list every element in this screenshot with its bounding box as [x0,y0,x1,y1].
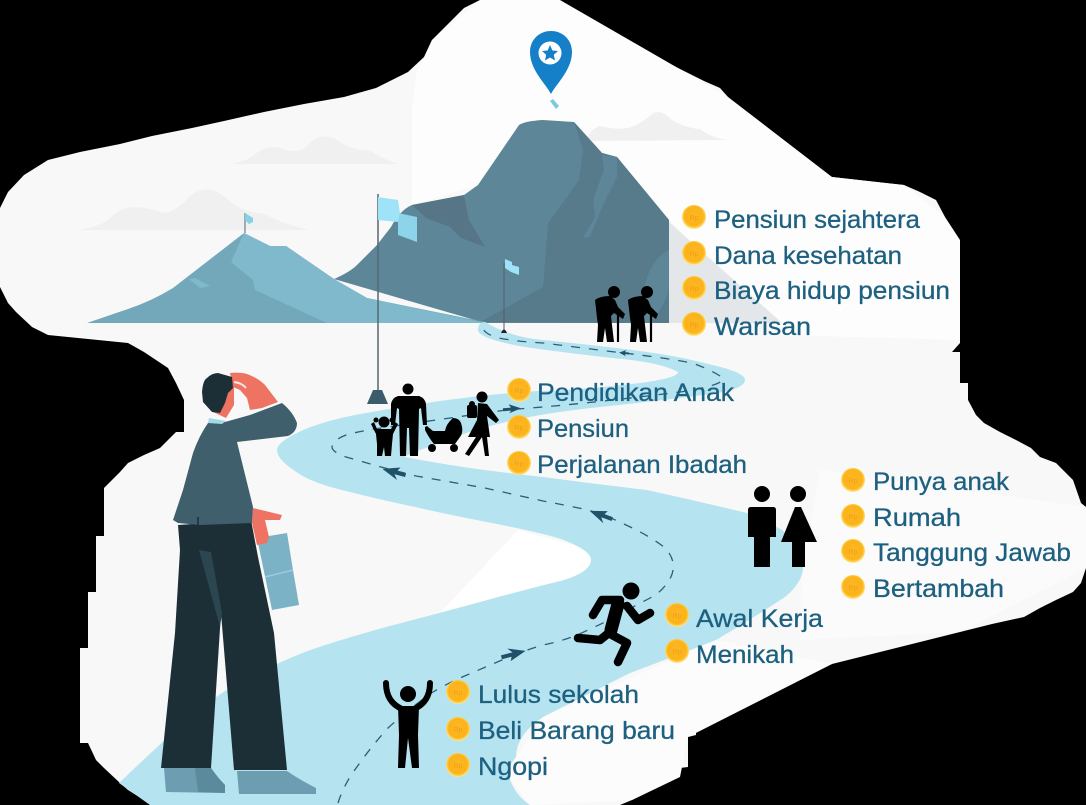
label: Perjalanan Ibadah [537,451,747,479]
coin: Rp [454,690,463,697]
cloud left [80,189,310,230]
coin [841,468,865,492]
coin: Rp [515,425,524,432]
label: Bertambah [873,575,1004,603]
list: Punya anak group [841,468,1071,603]
silhouette: elderly couple [595,286,658,342]
list: Lulus sekolah group [446,680,675,781]
arrow: road middle [587,505,614,526]
coin [665,603,689,627]
label: Warisan [714,313,811,341]
silhouette: runner [578,582,650,662]
list: Pendidikan Anak group [507,378,747,479]
dashed route line [332,328,723,803]
coin [841,575,865,599]
raised forearm hand [230,373,278,410]
small mountain [87,233,485,323]
silhouette: family with stroller [371,384,499,456]
mountain shadow [669,222,782,323]
label: Dana kesehatan [714,242,902,270]
coin [682,205,706,229]
coin: Rp [690,215,699,222]
coin: Rp [454,763,463,770]
coin: Rp [690,286,699,293]
coin [682,312,706,336]
location pin [530,31,572,109]
coin [507,415,531,439]
coin: Rp [673,649,682,656]
coin: Rp [673,613,682,620]
label: Beli Barang baru [478,717,675,745]
shoes [164,768,316,794]
jacket [173,403,297,525]
label: Biaya hidup pensiun [714,277,950,305]
label: Menikah [696,641,794,669]
finger highlight [234,382,246,388]
arrow: road start [500,644,527,663]
coin [665,639,689,663]
large flag with base [367,194,417,404]
coin [507,451,531,475]
label: Pensiun [537,415,629,443]
label: Pensiun sejahtera [714,206,920,234]
label: Tanggung Jawab [873,539,1071,567]
label: Pendidikan Anak [537,379,735,407]
jacket slit [197,517,199,526]
coin: Rp [849,585,858,592]
face [213,384,234,418]
coin: Rp [515,461,524,468]
silhouette: couple [748,486,817,567]
coin: Rp [690,322,699,329]
cloud center [232,136,398,164]
man looking at the road [161,373,316,794]
list: Awal Kerja group [665,603,823,669]
coin [446,680,470,704]
collar [208,418,226,424]
coin [841,504,865,528]
silhouette: graduate with raised arms [386,683,430,768]
hair [202,373,233,413]
coin [682,276,706,300]
small flag on road [501,259,519,333]
trouser highlight [199,550,222,627]
road [119,322,803,805]
label: Punya anak [873,468,1010,496]
arrow: road bend [381,463,407,482]
coin [446,753,470,777]
coin: Rp [454,727,463,734]
trousers [161,520,287,770]
label: Awal Kerja [696,605,823,633]
briefcase [257,533,299,610]
coin [841,539,865,563]
list: Pensiun sejahtera group [682,205,950,341]
coin [507,378,531,402]
coin [682,241,706,265]
background: white light areas [412,0,1086,805]
coin: Rp [849,514,858,521]
arrow: near elders [619,350,629,356]
flag on small mountain [245,213,253,233]
label: Ngopi [478,753,548,781]
coin: Rp [690,251,699,258]
cloud right [588,112,728,141]
arrow: near family [503,403,521,414]
coin: Rp [515,388,524,395]
big mountain [334,120,669,323]
label: Rumah [873,504,961,532]
label: Lulus sekolah [478,681,639,709]
coin: Rp [849,549,858,556]
lower hand [252,508,282,545]
coin: Rp [849,478,858,485]
coin [446,717,470,741]
